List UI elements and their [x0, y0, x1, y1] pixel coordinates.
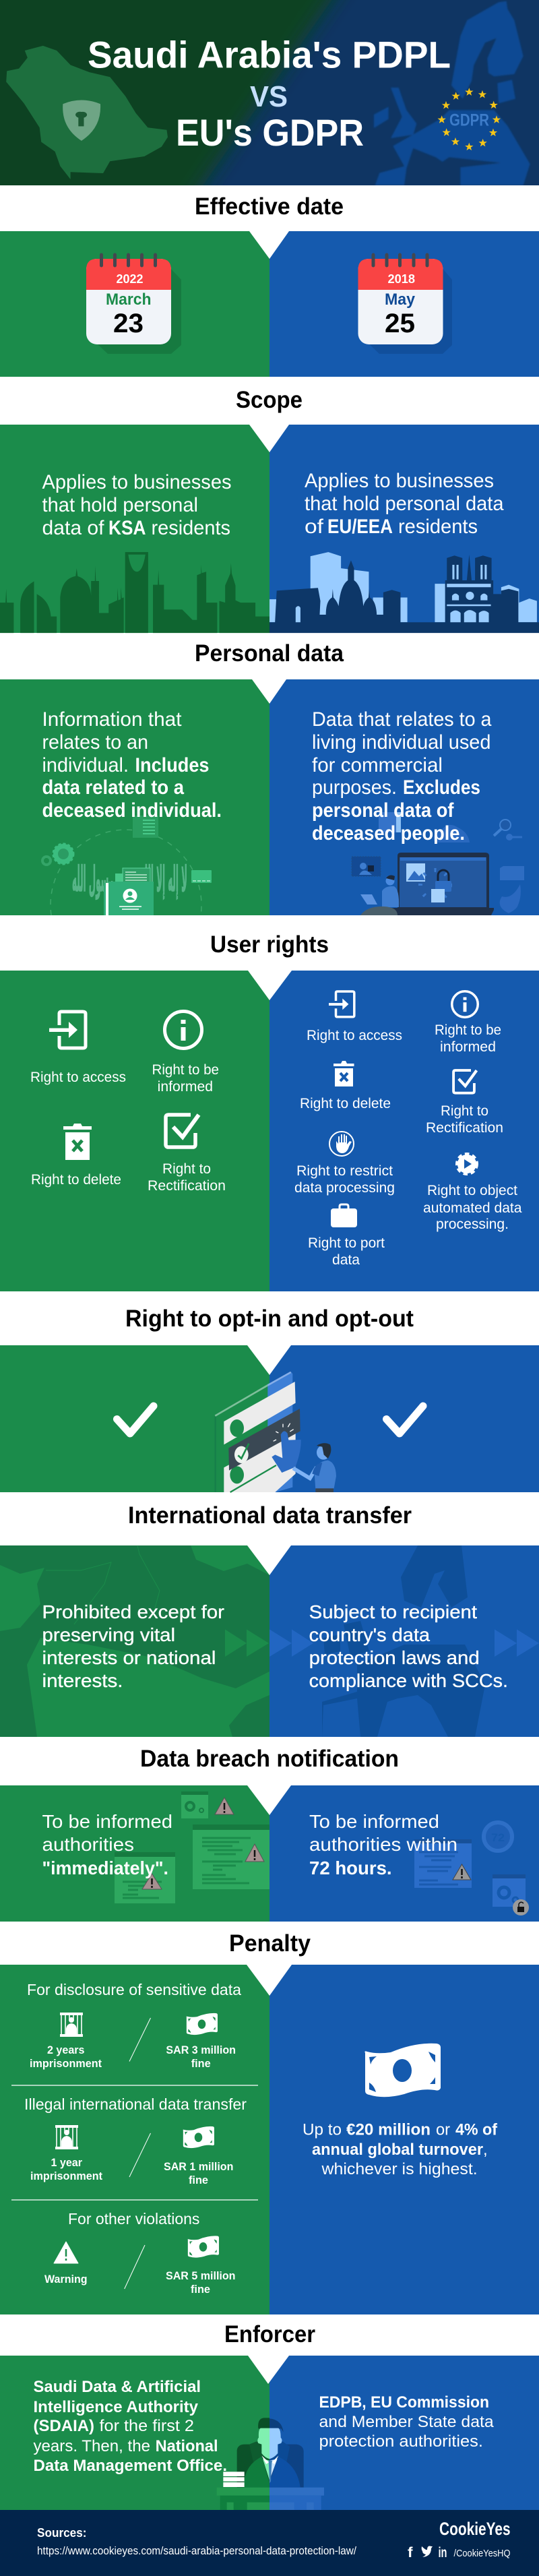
- text: KSA enforcer: years. Then, the: [34, 2437, 150, 2455]
- text: EU personal data: personal data of: [312, 799, 454, 822]
- label: KSA right to delete: Right to delete: [31, 1172, 121, 1188]
- text: EU personal data: living individual used: [312, 731, 490, 754]
- calendar: March 23 2022: [86, 255, 181, 354]
- icon: EU right to delete: [334, 1061, 354, 1086]
- text: EU personal data: for commercial: [312, 754, 443, 776]
- text: EU enforcer: protection authorities.: [319, 2432, 483, 2451]
- text: KSA enforcer: National: [156, 2437, 218, 2455]
- penalty group: other violations: For other violations: [68, 2210, 199, 2228]
- icon: EU right to rectification: [453, 1070, 476, 1093]
- illustration: EU breach windows: 72: [491, 1831, 505, 1844]
- penalty group: disclosure of sensitive data: SAR 3 million: [166, 2044, 236, 2056]
- panel: enforcer: [0, 2356, 539, 2510]
- text: KSA scope: Applies to businesses: [42, 471, 232, 493]
- map of Europe: [374, 1, 530, 185]
- text: EU breach: 72 hours.: [309, 1858, 392, 1878]
- text: KSA enforcer: Saudi Data & Artificial: [34, 2378, 201, 2396]
- text: EU penalty: Up to: [303, 2120, 342, 2139]
- text: EU penalty: 4% of: [455, 2120, 498, 2139]
- heading: User rights: User rights: [210, 931, 329, 958]
- text: EU personal data: purposes.: [312, 776, 397, 799]
- penalty group: other violations: SAR 5 million: [166, 2270, 236, 2282]
- text: KSA enforcer: [34, 2378, 227, 2475]
- label: EU right to delete: Right to delete: [300, 1096, 391, 1111]
- header banner: [0, 0, 539, 185]
- calendar: May 25 2018: 25: [385, 309, 415, 338]
- label: EU right to port data: Right to port: [308, 1235, 385, 1251]
- label: EU right to be informed: informed: [440, 1039, 496, 1055]
- text: EU transfer: compliance with SCCs.: [309, 1670, 508, 1691]
- text: KSA transfer: interests or national: [42, 1647, 216, 1668]
- arrows: KSA: [225, 1630, 269, 1657]
- text: EU personal data: [312, 708, 492, 845]
- text: EU penalty: or: [436, 2120, 450, 2139]
- illustration: EU breach windows: [414, 1822, 529, 1915]
- penalty group: other violations: [44, 2210, 236, 2296]
- calendar: March 23 2022: March: [106, 290, 151, 309]
- social links: f: [408, 2545, 414, 2560]
- label: EU right to port data: data: [332, 1252, 360, 1268]
- label: EU right to object: [423, 1183, 522, 1232]
- text: EU penalty: [303, 2120, 498, 2178]
- GDPR label: GDPR: [449, 111, 489, 129]
- icon: EU right to port data: [331, 1204, 357, 1227]
- text: EU personal data: Data that relates to a: [312, 708, 492, 731]
- text: EU scope: Applies to businesses: [305, 470, 494, 492]
- text: KSA breach: "immediately".: [42, 1858, 168, 1878]
- title: Saudi Arabia's PDPL: [88, 34, 451, 75]
- text: KSA scope: [42, 471, 232, 539]
- title: VS: [250, 80, 288, 113]
- text: EU transfer: protection laws and: [309, 1647, 480, 1668]
- penalty group: other violations: Warning: [44, 2273, 88, 2286]
- text: EU personal data: deceased people.: [312, 822, 465, 845]
- text: EU enforcer: and Member State data: [319, 2413, 494, 2431]
- label: EU right to port data: [308, 1235, 385, 1268]
- heading: Enforcer: Enforcer: [224, 2321, 315, 2348]
- map of Saudi Arabia: [6, 46, 168, 179]
- icon: EU right to restrict processing: [329, 1132, 354, 1156]
- panel: penalty: [0, 1965, 539, 2314]
- label: KSA right to rectification: Right to: [162, 1161, 211, 1177]
- illustration: consent form with hand: [214, 1372, 336, 1492]
- icon: KSA right to be informed: [164, 1011, 202, 1049]
- sources: https://www.cookieyes.com/saudi-arabia-personal-data-protection-law/: [37, 2544, 356, 2557]
- skyline: Paris: [270, 552, 539, 633]
- icon: KSA right to delete: [63, 1124, 92, 1160]
- title: EU's GDPR: [176, 111, 364, 154]
- text: KSA personal data: Information that: [42, 708, 182, 731]
- penalty group: illegal international data transfer: SAR 1 million: [164, 2161, 233, 2173]
- label: EU right to be informed: [435, 1022, 501, 1055]
- icon: EU check mark: [387, 1406, 423, 1434]
- text: KSA personal data: individual.: [42, 754, 129, 776]
- text: KSA enforcer: for the first 2: [100, 2417, 194, 2435]
- panel: user rights: [0, 971, 539, 1291]
- heading: Effective date: Effective date: [195, 193, 344, 220]
- arrows: EU: [270, 1630, 539, 1657]
- text: KSA transfer: preserving vital: [42, 1624, 175, 1645]
- penalty group: illegal international data transfer: fine: [189, 2174, 208, 2186]
- icon: KSA right to access: [49, 1012, 86, 1048]
- text: KSA scope: residents: [151, 517, 230, 539]
- text: KSA transfer: [42, 1601, 224, 1691]
- panel: scope: [0, 425, 539, 633]
- text: KSA scope: data of: [42, 517, 104, 539]
- label: EU right to object: automated data: [423, 1200, 522, 1216]
- text: EU personal data: Excludes: [403, 776, 480, 799]
- heading: Personal data: Personal data: [195, 640, 344, 667]
- text: EU penalty: €20 million: [346, 2120, 431, 2139]
- label: KSA right to access: Right to access: [30, 1070, 126, 1085]
- text: EU scope: residents: [398, 516, 478, 538]
- logo: CookieYes: CookieYes: [439, 2519, 511, 2539]
- text: EU breach: [309, 1811, 457, 1878]
- panel: personal data: [0, 679, 539, 915]
- label: KSA right to be informed: informed: [158, 1079, 213, 1095]
- text: EU scope: of: [305, 516, 324, 538]
- social links: /CookieYesHQ: [454, 2548, 511, 2559]
- heading: Scope: Scope: [236, 387, 303, 413]
- label: EU right to restrict processing: Right to restrict: [296, 1163, 393, 1179]
- text: KSA personal data: deceased individual.: [42, 799, 222, 822]
- text: EU transfer: [309, 1601, 508, 1691]
- illustration: EU personal data: [352, 812, 524, 915]
- text: EU scope: that hold personal data: [305, 493, 504, 515]
- penalty group: illegal international data transfer: 1 year: [51, 2157, 83, 2169]
- penalty group: disclosure of sensitive data: imprisonment: [30, 2058, 102, 2070]
- calendar: May 25 2018: [358, 255, 452, 354]
- map: Europe: [322, 1545, 485, 1737]
- penalty group: other violations: fine: [191, 2283, 210, 2296]
- heading: International data transfer: International data transfer: [128, 1502, 412, 1529]
- panel: data breach notification: [0, 1785, 539, 1922]
- title: [88, 34, 451, 154]
- footer: [0, 2510, 539, 2576]
- text: EU scope: [305, 470, 504, 538]
- penalty group: illegal international data transfer: [24, 2095, 247, 2186]
- panel: effective date: [0, 231, 539, 377]
- label: EU right to restrict processing: data processing: [294, 1180, 395, 1196]
- text: KSA personal data: Includes: [135, 754, 209, 776]
- penalty group: disclosure of sensitive data: 2 years: [47, 2044, 85, 2056]
- label: EU right to restrict processing: [294, 1163, 395, 1196]
- text: EU transfer: country's data: [309, 1624, 430, 1645]
- icon: KSA right to rectification: [166, 1115, 199, 1147]
- text: EU penalty: whichever is highest.: [321, 2160, 478, 2178]
- text: EU enforcer: EDPB, EU Commission: [319, 2393, 489, 2412]
- label: EU right to rectification: Right to: [441, 1103, 488, 1119]
- label: KSA right to be informed: [152, 1062, 219, 1095]
- map: Middle East: [0, 1545, 270, 1737]
- label: KSA right to rectification: [148, 1161, 226, 1194]
- text: KSA enforcer: Data Management Office.: [34, 2457, 227, 2475]
- label: KSA right to be informed: Right to be: [152, 1062, 219, 1078]
- text: KSA personal data: data related to a: [42, 776, 184, 799]
- social links: [408, 2545, 511, 2560]
- illustration: KSA personal data: [42, 816, 212, 915]
- text: EU penalty: annual global turnover: [312, 2141, 483, 2159]
- text: KSA enforcer: Intelligence Authority: [34, 2398, 199, 2416]
- text: KSA transfer: Prohibited except for: [42, 1601, 224, 1622]
- icon: EU right to access: [329, 991, 354, 1017]
- illustration: KSA breach windows: [115, 1791, 270, 1903]
- label: EU right to object: Right to object: [427, 1183, 517, 1198]
- sources: [37, 2526, 356, 2557]
- label: KSA right to rectification: Rectification: [148, 1178, 226, 1194]
- text: KSA personal data: [42, 708, 222, 822]
- heading: Data breach notification: Data breach notification: [140, 1746, 399, 1772]
- text: EU breach: authorities within: [309, 1834, 457, 1855]
- illustration: official at desk: [217, 2418, 324, 2510]
- icon: KSA check mark: [117, 1406, 154, 1434]
- label: EU right to be informed: Right to be: [435, 1022, 501, 1038]
- heading: Penalty: Penalty: [229, 1930, 311, 1957]
- calendar: May 25 2018: 2018: [388, 272, 415, 286]
- text: EU penalty: ,: [483, 2141, 488, 2159]
- label: EU right to rectification: Rectification: [426, 1120, 503, 1136]
- penalty group: disclosure of sensitive data: [27, 1981, 241, 2070]
- panel: international data transfer: [0, 1545, 539, 1737]
- icon: EU fine banknote: [364, 2044, 441, 2097]
- text: EU scope: EU/EEA: [327, 516, 393, 538]
- penalty group: disclosure of sensitive data: For disclosure of sensitive data: [27, 1981, 241, 1998]
- label: EU right to object: processing.: [436, 1217, 509, 1232]
- icon: EU right to be informed: [452, 991, 478, 1017]
- panel: opt-in and opt-out: [0, 1345, 539, 1492]
- penalty group: illegal international data transfer: Illegal international data transfer: [24, 2095, 247, 2113]
- EU stars ring: [437, 88, 501, 150]
- text: KSA breach: To be informed: [42, 1811, 172, 1832]
- calendar: March 23 2022: 23: [113, 309, 144, 338]
- heading: Right to opt-in and opt-out: Right to opt-in and opt-out: [125, 1306, 414, 1332]
- text: KSA scope: that hold personal: [42, 494, 198, 516]
- calendar: March 23 2022: 2022: [116, 272, 143, 286]
- icon: EU right to object: [457, 1155, 476, 1173]
- sources: Sources:: [37, 2526, 86, 2540]
- label: EU right to rectification: [426, 1103, 503, 1136]
- text: EU enforcer: [319, 2393, 494, 2451]
- label: EU right to access: Right to access: [307, 1028, 402, 1043]
- text: KSA breach: authorities: [42, 1834, 134, 1855]
- penalty group: disclosure of sensitive data: fine: [191, 2058, 211, 2070]
- penalty group: illegal international data transfer: imprisonment: [30, 2170, 102, 2182]
- text: EU transfer: Subject to recipient: [309, 1601, 477, 1622]
- text: KSA breach: [42, 1811, 172, 1878]
- text: EU breach: To be informed: [309, 1811, 439, 1832]
- skyline: Riyadh: [0, 552, 270, 633]
- text: KSA scope: KSA: [108, 517, 146, 539]
- text: KSA enforcer: (SDAIA): [34, 2417, 94, 2435]
- social links: in: [438, 2545, 447, 2560]
- text: KSA personal data: relates to an: [42, 731, 148, 754]
- calendar: May 25 2018: May: [385, 290, 416, 309]
- text: KSA transfer: interests.: [42, 1670, 123, 1691]
